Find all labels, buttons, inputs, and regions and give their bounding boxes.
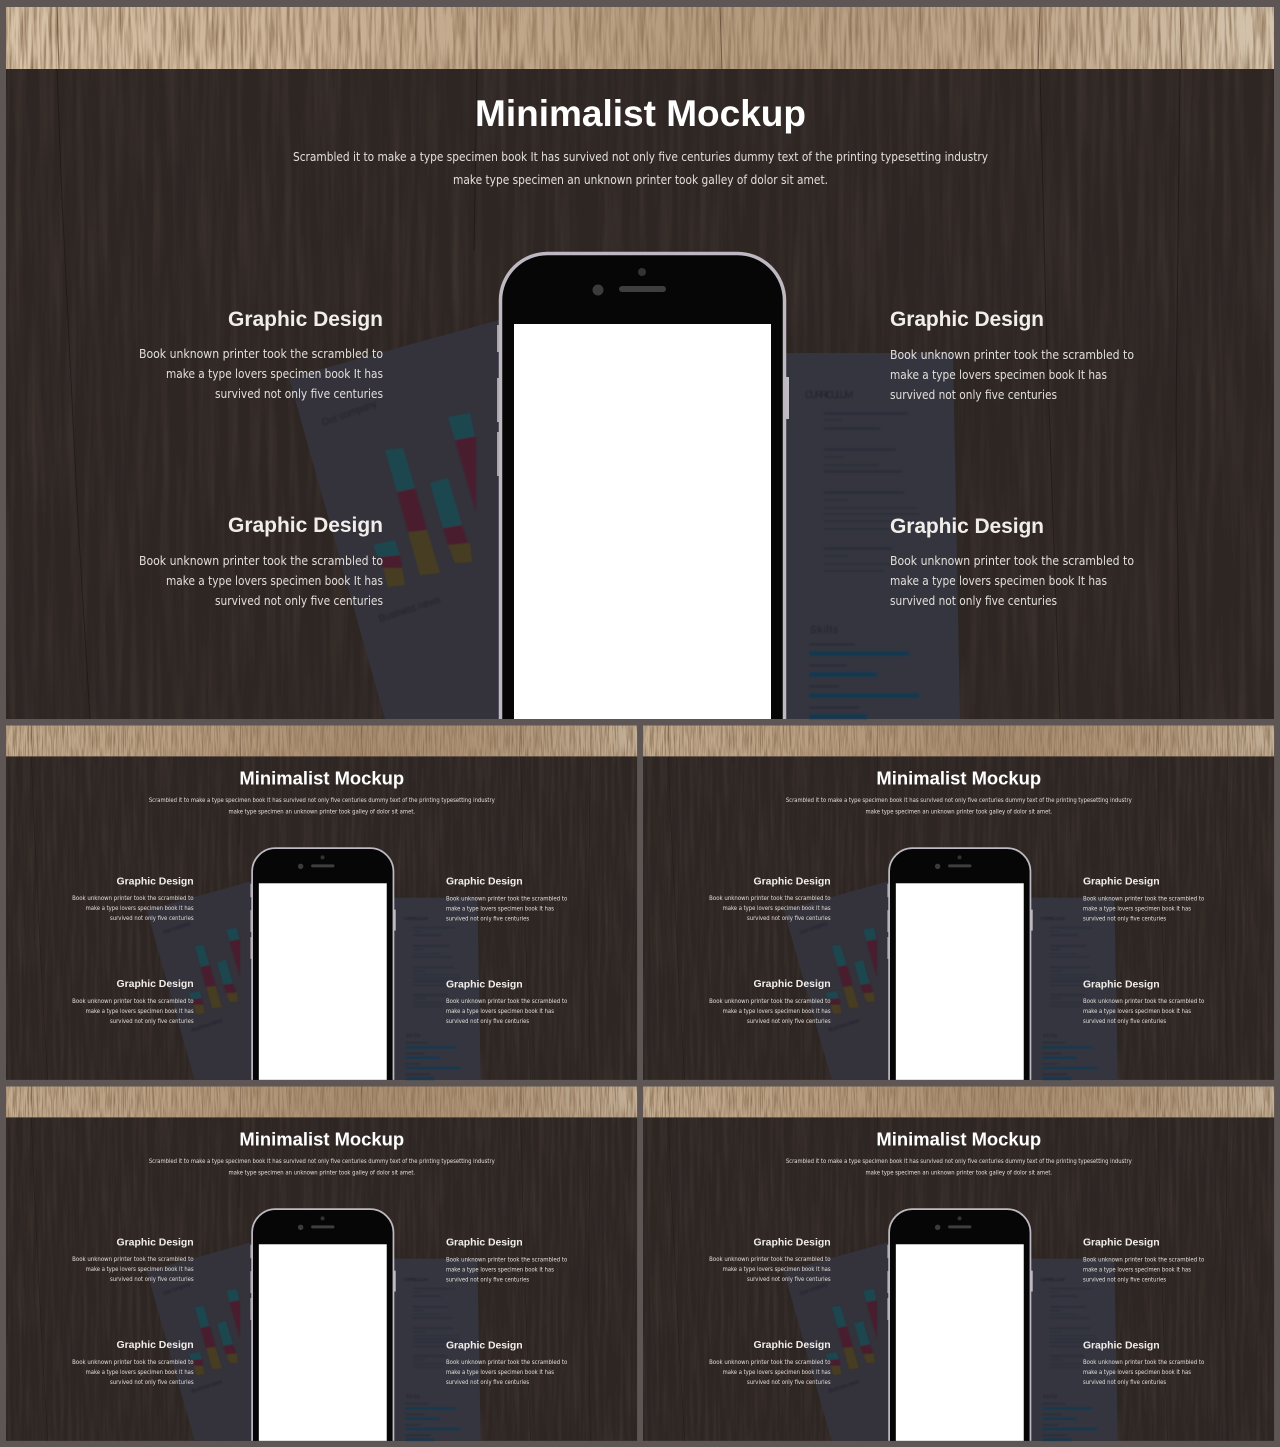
panel: small slide top right [643,726,1274,1080]
panel: small slide top left [6,726,637,1080]
wood background with light strip [6,726,637,1080]
intro text [786,797,1132,816]
title: Minimalist Mockup [876,768,1041,789]
text block: lower right: Book unknown printer took the scrambled to [446,998,568,1005]
resume paper document [785,353,960,719]
text block: lower right: make a type lovers specimen book It has [446,1008,554,1015]
intro text: make type specimen an unknown printer took galley of dolor sit amet. [228,1170,415,1177]
text block: upper left: make a type lovers specimen book It has [166,366,383,381]
text block: upper right: survived not only five centuries [1083,1277,1166,1284]
chart paper document [784,881,888,1080]
wood background with light strip [643,1086,1274,1441]
text block: lower right: Graphic Design [1083,979,1160,990]
text block: upper left [709,1237,831,1283]
text block: upper right: survived not only five centuries [890,387,1057,402]
text block: lower right [446,1340,568,1386]
text block: upper right: survived not only five centuries [446,916,529,923]
intro text [149,1158,495,1177]
text block: upper left: survived not only five centuries [110,1276,194,1283]
text block: upper left: make a type lovers specimen book It has [86,1266,194,1273]
text block: upper right: Graphic Design [890,308,1044,331]
wood background with light strip [6,1086,637,1441]
text block: lower left: Graphic Design [753,979,831,990]
text block: lower right [1083,979,1205,1025]
text block: lower right: survived not only five centuries [1083,1379,1166,1386]
text block: upper right: Graphic Design [446,876,523,887]
text block: lower left: make a type lovers specimen book It has [723,1008,831,1015]
text block: upper right [446,1237,568,1284]
text block: lower right: Book unknown printer took the scrambled to [1083,1359,1205,1366]
text block: lower right: make a type lovers specimen book It has [890,573,1107,588]
text block: lower left: Book unknown printer took the scrambled to [72,1359,194,1366]
text block: upper right: Book unknown printer took the scrambled to [446,896,568,903]
intro text: Scrambled it to make a type specimen book It has survived not only five centuries dummy text of the printing typesetting industry [786,797,1132,804]
text block: lower left: make a type lovers specimen book It has [166,573,383,588]
text block: upper right: survived not only five centuries [446,1277,529,1284]
text block: lower left: Book unknown printer took the scrambled to [139,553,383,568]
text block: upper right [1083,876,1205,923]
phone mockup [887,1209,1033,1441]
text block: upper right [890,308,1134,402]
text block: upper left: Graphic Design [753,876,831,887]
resume paper document [1031,898,1118,1080]
text block: lower left [72,1340,194,1386]
resume paper document [394,1259,481,1441]
text block: lower right: make a type lovers specimen book It has [446,1369,554,1376]
text block: lower left: survived not only five centuries [110,1018,194,1025]
chart paper document [147,881,251,1080]
intro text: make type specimen an unknown printer took galley of dolor sit amet. [228,809,415,816]
intro text: make type specimen an unknown printer took galley of dolor sit amet. [865,809,1052,816]
chart paper document [784,1242,888,1441]
phone mockup [497,254,789,719]
text block: upper left: survived not only five centuries [747,915,831,922]
text block: lower right: make a type lovers specimen book It has [1083,1008,1191,1015]
text block: upper left: make a type lovers specimen book It has [86,905,194,912]
text block: lower right [890,515,1134,608]
text block: upper right [1083,1237,1205,1284]
text block: upper left: Book unknown printer took the scrambled to [709,895,831,902]
text block: upper right: Book unknown printer took the scrambled to [1083,1257,1205,1264]
text block: lower left: Graphic Design [116,979,194,990]
text block: lower left [709,979,831,1025]
text block: lower left: Book unknown printer took the scrambled to [709,1359,831,1366]
text block: lower right: Graphic Design [446,979,523,990]
text block: upper right: make a type lovers specimen book It has [446,1267,554,1274]
text block: upper left: survived not only five centuries [215,386,383,401]
text block: upper left: survived not only five centuries [110,915,194,922]
text block: lower left [72,979,194,1025]
title: Minimalist Mockup [239,1129,404,1150]
text block: lower left [709,1340,831,1386]
text block: lower right: Graphic Design [446,1340,523,1351]
title: Minimalist Mockup [876,1129,1041,1150]
text block: upper right: Book unknown printer took the scrambled to [446,1257,568,1264]
text block: lower left [139,514,383,608]
text block: lower left: make a type lovers specimen book It has [723,1369,831,1376]
text block: lower right: survived not only five centuries [446,1379,529,1386]
text block: lower right: Book unknown printer took the scrambled to [1083,998,1205,1005]
intro text: make type specimen an unknown printer took galley of dolor sit amet. [453,172,828,187]
text block: upper right: Book unknown printer took the scrambled to [890,347,1134,362]
wood background with light strip [643,726,1274,1080]
text block: upper right: make a type lovers specimen book It has [1083,1267,1191,1274]
title: Minimalist Mockup [239,768,404,789]
text block: lower left: survived not only five centuries [215,593,383,608]
text block: lower left: Book unknown printer took the scrambled to [72,998,194,1005]
text block: upper right: make a type lovers specimen book It has [446,906,554,913]
text block: upper left: Book unknown printer took the scrambled to [709,1256,831,1263]
intro text: Scrambled it to make a type specimen book It has survived not only five centuries dummy text of the printing typesetting industry [293,149,988,164]
intro text [786,1158,1132,1177]
text block: upper left: survived not only five centuries [747,1276,831,1283]
intro text: make type specimen an unknown printer took galley of dolor sit amet. [865,1170,1052,1177]
text block: lower right: Book unknown printer took the scrambled to [890,553,1134,568]
text block: lower right: Graphic Design [1083,1340,1160,1351]
intro text [149,797,495,816]
text block: upper right: survived not only five centuries [1083,916,1166,923]
intro text: Scrambled it to make a type specimen book It has survived not only five centuries dummy text of the printing typesetting industry [786,1158,1132,1165]
phone mockup [250,1209,396,1441]
text block: upper left: Book unknown printer took the scrambled to [72,1256,194,1263]
text block: lower right: survived not only five centuries [1083,1018,1166,1025]
text block: upper right: make a type lovers specimen book It has [1083,906,1191,913]
chart paper document [289,320,499,719]
text block: upper left [72,1237,194,1283]
panel: small slide bottom left [6,1086,637,1441]
text block: lower left: Graphic Design [116,1340,194,1351]
text block: lower right [1083,1340,1205,1386]
text block: upper left: make a type lovers specimen book It has [723,905,831,912]
text block: lower right [446,979,568,1025]
resume paper document [394,898,481,1080]
text block: lower left: make a type lovers specimen book It has [86,1008,194,1015]
text block: upper left: Graphic Design [753,1237,831,1248]
text block: upper left: make a type lovers specimen book It has [723,1266,831,1273]
phone mockup [887,848,1033,1080]
text block: upper right: Graphic Design [1083,876,1160,887]
wood background with light strip [6,7,1274,719]
text block: lower right: survived not only five centuries [890,593,1057,608]
text block: lower right: Graphic Design [890,515,1044,538]
text block: upper right: make a type lovers specimen book It has [890,367,1107,382]
text block: upper right: Graphic Design [446,1237,523,1248]
text block: lower right: Book unknown printer took the scrambled to [446,1359,568,1366]
text block: lower right: make a type lovers specimen book It has [1083,1369,1191,1376]
text block: upper left [72,876,194,922]
intro text: Scrambled it to make a type specimen book It has survived not only five centuries dummy text of the printing typesetting industry [149,1158,495,1165]
text block: upper left: Graphic Design [116,1237,194,1248]
text block: upper left: Book unknown printer took the scrambled to [139,346,383,361]
text block: lower left: Graphic Design [228,514,383,537]
phone mockup [250,848,396,1080]
text block: lower right: survived not only five centuries [446,1018,529,1025]
text block: upper left [709,876,831,922]
text block: lower left: make a type lovers specimen book It has [86,1369,194,1376]
text block: upper left: Graphic Design [228,308,383,331]
intro text: Scrambled it to make a type specimen book It has survived not only five centuries dummy text of the printing typesetting industry [149,797,495,804]
text block: lower left: Graphic Design [753,1340,831,1351]
text block: upper left: Graphic Design [116,876,194,887]
resume paper document [1031,1259,1118,1441]
title: Minimalist Mockup [475,93,806,134]
text block: lower left: survived not only five centuries [747,1379,831,1386]
panel: large slide [6,7,1274,719]
text block: lower left: survived not only five centuries [747,1018,831,1025]
text block: lower left: survived not only five centuries [110,1379,194,1386]
text block: upper left: Book unknown printer took the scrambled to [72,895,194,902]
text block: upper right: Book unknown printer took the scrambled to [1083,896,1205,903]
text block: upper right [446,876,568,923]
intro text [293,149,988,187]
text block: lower left: Book unknown printer took the scrambled to [709,998,831,1005]
text block: upper right: Graphic Design [1083,1237,1160,1248]
text block: upper left [139,308,383,401]
chart paper document [147,1242,251,1441]
panel: small slide bottom right [643,1086,1274,1441]
